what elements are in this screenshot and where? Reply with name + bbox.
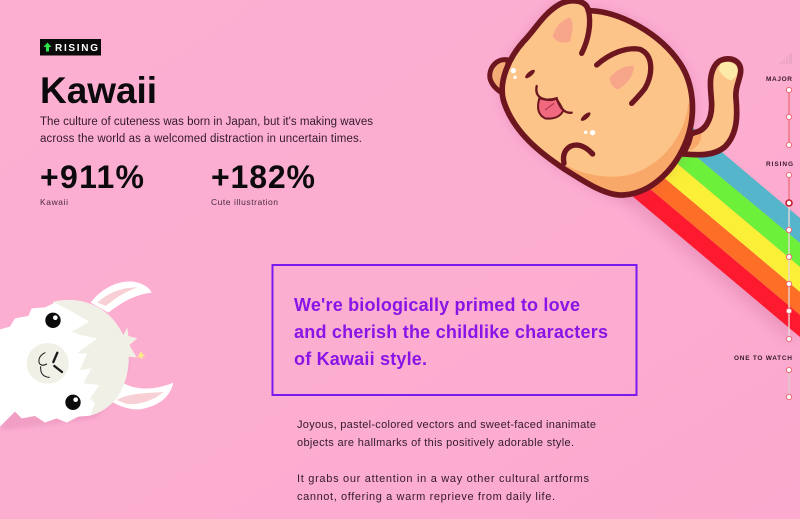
body text: It grabs our attention in a way other cultural artforms bbox=[297, 473, 590, 485]
stat: cute illustration: Cute illustration bbox=[211, 197, 278, 207]
intro text: across the world as a welcomed distraction in uncertain times. bbox=[40, 133, 362, 145]
ear markings bbox=[553, 17, 634, 89]
rainbow trail bbox=[616, 100, 800, 345]
signal icon bbox=[780, 54, 792, 64]
llama snout bbox=[27, 343, 69, 384]
cat left ear bbox=[490, 60, 508, 94]
body outline bbox=[502, 1, 692, 195]
llama nose and mouth bbox=[39, 353, 62, 377]
callout quote: We're biologically primed to love bbox=[294, 295, 580, 315]
cat tail bbox=[683, 59, 741, 155]
body text: objects are hallmarks of this positively adorable style. bbox=[297, 437, 574, 449]
llama cream mane bbox=[50, 300, 137, 416]
title: Kawaii bbox=[40, 70, 157, 111]
stat: cute illustration: +182% bbox=[211, 159, 315, 195]
body text: Joyous, pastel-colored vectors and sweet-faced inanimate bbox=[297, 419, 596, 431]
callout quote bbox=[272, 265, 636, 395]
label: major: MAJOR bbox=[766, 76, 792, 83]
intro text: The culture of cuteness was born in Japan, but it's making waves bbox=[40, 116, 373, 128]
llama top ear bbox=[91, 281, 152, 313]
intro text bbox=[40, 116, 373, 145]
llama star bbox=[137, 351, 145, 360]
body text: cannot, offering a warm reprieve from daily life. bbox=[297, 491, 555, 503]
current marker bbox=[786, 200, 792, 206]
body shading bbox=[565, 104, 690, 192]
body text bbox=[297, 419, 596, 503]
llama shadow bbox=[1, 305, 129, 430]
llama eyes bbox=[45, 313, 81, 410]
stat: kawaii: +911% bbox=[40, 159, 144, 195]
badge: rising bbox=[40, 39, 101, 56]
face bbox=[511, 68, 595, 135]
icon: llama bbox=[0, 281, 173, 430]
arrow icon bbox=[44, 42, 52, 52]
ear and paw strokes bbox=[564, 10, 651, 163]
callout quote: of Kawaii style. bbox=[294, 349, 427, 369]
cat body bbox=[502, 1, 692, 195]
label: rising: RISING bbox=[766, 161, 793, 168]
cat shadow bbox=[502, 4, 692, 195]
llama white fur bbox=[0, 303, 99, 427]
llama bottom ear bbox=[112, 383, 173, 409]
icon: flying cat bbox=[490, 1, 741, 207]
stat: kawaii: Kawaii bbox=[40, 197, 68, 207]
callout quote: and cherish the childlike characters bbox=[294, 322, 608, 342]
label: one to watch: ONE TO WATCH bbox=[734, 355, 792, 362]
badge: rising: RISING bbox=[55, 43, 98, 54]
timeline scale bbox=[734, 54, 793, 400]
